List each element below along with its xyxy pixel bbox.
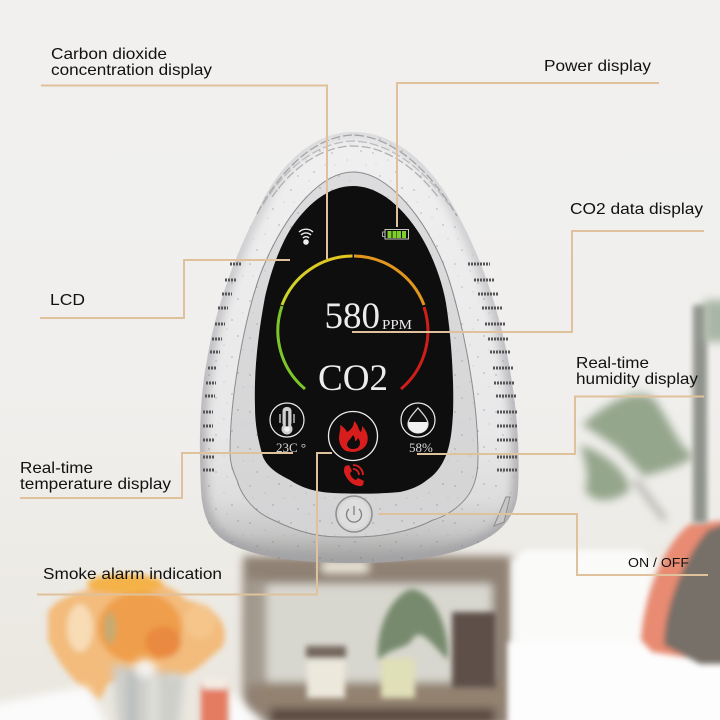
CO2 label: CO2 (318, 358, 388, 399)
background: top-right foliage (704, 300, 720, 342)
leader line: on/off (378, 514, 708, 575)
CO2 reading: PPM (382, 318, 413, 333)
background: room plant (580, 394, 695, 520)
top vents (257, 135, 457, 216)
left side vents (203, 264, 242, 470)
device shell (200, 132, 519, 563)
power button (336, 496, 372, 532)
label: temperature: Real-time (20, 460, 93, 477)
label: on/off: ON / OFF (628, 555, 689, 570)
leader line: power (397, 83, 659, 227)
label: temperature: temperature display (20, 476, 171, 493)
label: power display: Power display (544, 58, 651, 75)
right side vents (468, 264, 518, 470)
label: humidity: humidity display (576, 371, 698, 388)
label: carbon dioxide: Carbon dioxide (51, 46, 167, 63)
leader line: carbon dioxide (41, 86, 327, 259)
label: carbon dioxide: concentration display (51, 62, 212, 79)
temperature reading: 23C ° (276, 440, 306, 455)
background: table and vase (0, 659, 268, 720)
humidity reading: 58% (409, 440, 433, 455)
background: books (452, 612, 496, 688)
CO2 reading: 580 (324, 296, 380, 337)
label: humidity (576, 355, 698, 388)
label: CO2 data display: CO2 data display (570, 201, 703, 218)
label: carbon dioxide (51, 46, 212, 79)
icon: wifi (299, 229, 313, 245)
background: red cylinder (201, 678, 228, 720)
label: humidity: Real-time (576, 355, 649, 372)
leader line: temperature (20, 453, 293, 498)
leader line: LCD (40, 260, 290, 318)
icon: phone alarm (344, 465, 364, 486)
CO2 reading (324, 296, 413, 337)
background: orange flowers (48, 574, 225, 700)
label: smoke alarm: Smoke alarm indication (43, 566, 222, 583)
leader line: CO2 data (352, 231, 704, 332)
icon: battery (382, 230, 408, 239)
background: dark post (693, 305, 707, 523)
leader line: smoke alarm (37, 453, 332, 594)
background: shelf plant (378, 589, 448, 660)
USB port (494, 497, 510, 526)
gauge arc (278, 256, 428, 389)
leader line: humidity (417, 396, 704, 454)
label: temperature (20, 460, 171, 493)
icon: smoke alarm flame (328, 412, 378, 460)
background: shelf (243, 556, 511, 720)
icon: humidity drop (401, 403, 435, 437)
front bezel (230, 172, 478, 537)
background: jars (306, 646, 415, 698)
icon: thermometer (270, 403, 304, 437)
background: sofa (508, 550, 720, 720)
label: LCD: LCD (50, 292, 85, 309)
device: CO2 monitor (200, 132, 519, 563)
LCD screen (255, 186, 453, 494)
background: cushion (641, 520, 720, 664)
